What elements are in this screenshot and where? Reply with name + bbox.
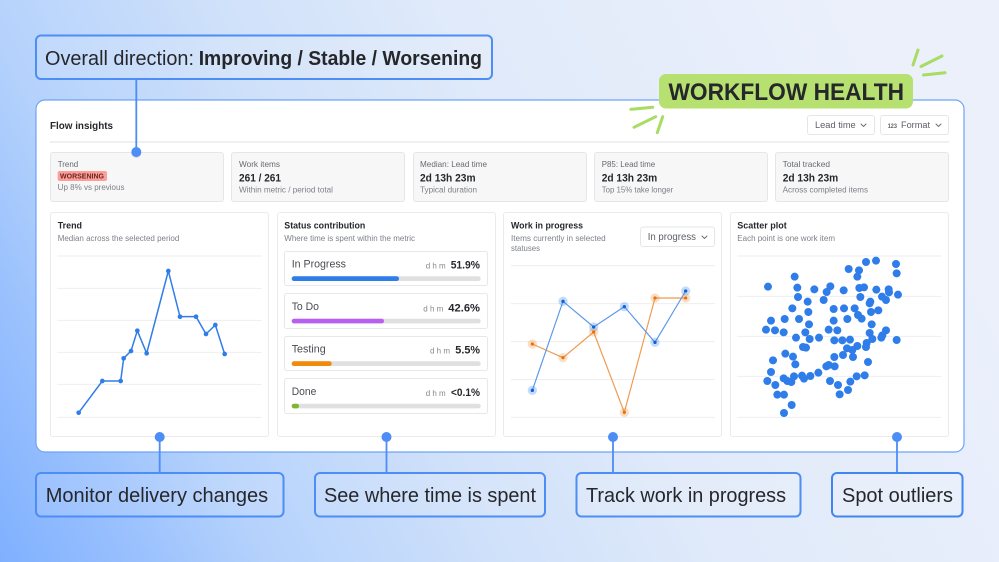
status row: testing: 5.5% — [455, 345, 480, 357]
callout: see where time is spent: See where time is spent — [324, 484, 536, 507]
status row: testing — [284, 336, 488, 370]
panel: trend chart: Median across the selected period — [58, 234, 179, 243]
callout: overall direction: Overall direction: — [45, 47, 194, 70]
kpi card: total tracked: 2d 13h 23m — [783, 172, 838, 184]
panel: flow insights dashboard — [36, 36, 964, 516]
panel: work in progress: Items currently in selected — [511, 234, 606, 243]
callout: monitor delivery changes — [36, 473, 284, 516]
control: lead time dropdown: Lead time — [815, 120, 856, 130]
kpi card: trend: Trend — [58, 160, 79, 169]
title badge: workflow health: WORKFLOW HEALTH — [668, 79, 904, 106]
scatter chart: work items — [737, 256, 941, 417]
status row: in progress: In Progress — [292, 258, 346, 270]
status row: to do: 42.6% — [448, 302, 480, 314]
line chart: work in progress series — [511, 266, 715, 417]
status row: testing: d h m — [430, 347, 450, 356]
status row: to do: To Do — [292, 301, 319, 313]
callout: spot outliers — [832, 473, 962, 516]
arrow: trend connector — [155, 432, 165, 473]
status row: done: Done — [292, 386, 316, 398]
callout: see where time is spent — [315, 473, 545, 516]
kpi card: median lead time: Median: Lead time — [420, 160, 487, 169]
line chart: median trend — [57, 256, 262, 417]
status row: in progress — [284, 252, 488, 286]
panel: scatter plot: Each point is one work item — [737, 234, 835, 243]
status row: testing: Testing — [292, 344, 326, 356]
status row: done — [284, 378, 488, 414]
status row: in progress: d h m — [426, 262, 446, 271]
control: lead time dropdown — [808, 116, 874, 134]
kpi card: work items: 261 / 261 — [239, 172, 281, 184]
status row: in progress: 51.9% — [451, 260, 480, 272]
arrow: scatter connector — [892, 432, 902, 473]
control: in progress dropdown: In progress — [648, 232, 696, 243]
heading: flow insights: Flow insights — [50, 120, 113, 132]
panel: work in progress — [504, 212, 722, 436]
kpi card: work items: Work items — [239, 160, 280, 169]
status row: done: d h m — [426, 389, 446, 398]
kpi card: work items: Within metric / period total — [239, 186, 333, 194]
kpi card: trend — [50, 152, 224, 202]
panel: status contribution: Status contribution — [284, 221, 365, 232]
kpi card: p85 lead time — [594, 152, 768, 202]
panel: status contribution: Where time is spent within the metric — [284, 234, 415, 243]
kpi card: p85 lead time: 2d 13h 23m — [602, 172, 657, 184]
status row: done: <0.1% — [451, 387, 480, 399]
callout: track work in progress: Track work in progress — [586, 484, 786, 507]
status row: to do — [284, 294, 488, 328]
control: in progress dropdown — [640, 227, 714, 246]
panel: status contribution — [278, 212, 496, 436]
badge: worsening: WORSENING — [60, 172, 104, 181]
kpi card: trend: Up 8% vs previous — [58, 183, 125, 192]
control: format dropdown — [880, 116, 948, 134]
callout: overall direction — [36, 36, 492, 79]
kpi card: median lead time — [414, 152, 586, 202]
status row: to do: d h m — [423, 304, 444, 313]
kpi card: median lead time: Typical duration — [420, 186, 477, 194]
callout: monitor delivery changes: Monitor delivery changes — [46, 484, 268, 507]
callout: track work in progress — [576, 473, 800, 516]
kpi card: total tracked — [776, 152, 948, 202]
panel: trend chart — [50, 212, 268, 436]
arrow: status connector — [382, 432, 392, 473]
kpi card: total tracked: Total tracked — [783, 160, 830, 169]
panel: work in progress: statuses — [511, 244, 540, 253]
arrow: work in progress connector — [608, 432, 618, 473]
icon: sparks right of title — [913, 50, 945, 75]
kpi card: median lead time: 2d 13h 23m — [420, 172, 476, 184]
panel: work in progress: Work in progress — [511, 221, 583, 232]
panel: trend chart: Trend — [58, 221, 82, 232]
kpi card: work items — [232, 152, 404, 202]
kpi card: total tracked: Across completed items — [783, 186, 868, 194]
callout: spot outliers: Spot outliers — [842, 484, 953, 507]
icon: sparks left of title — [631, 107, 663, 133]
kpi card: p85 lead time: Top 15% take longer — [602, 186, 674, 194]
panel: scatter plot: Scatter plot — [737, 221, 787, 232]
arrow: overall direction connector — [131, 79, 141, 158]
control: format dropdown: Format — [901, 120, 930, 130]
callout: overall direction: Improving / Stable / Worsening — [199, 47, 482, 70]
panel: scatter plot — [730, 212, 948, 436]
kpi card: p85 lead time: P85: Lead time — [602, 160, 656, 169]
control: format dropdown: 123 — [888, 123, 897, 130]
